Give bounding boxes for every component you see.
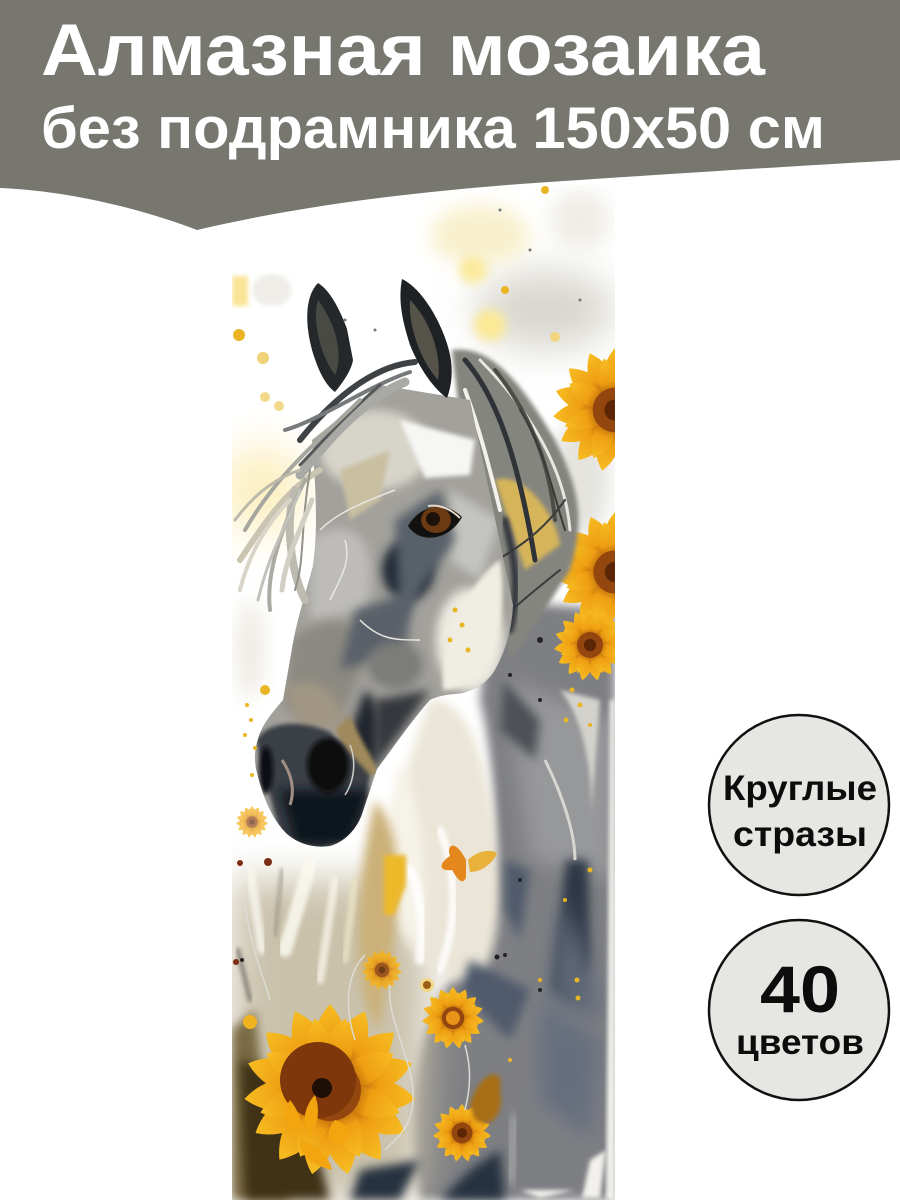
header banner (0, 0, 900, 230)
horse head (255, 385, 513, 850)
small sunflowers (236, 806, 501, 1163)
eye (408, 506, 462, 538)
sunflowers on right (553, 348, 615, 680)
title line 2: без подрамника 150х50 см (41, 96, 825, 161)
painting: horse with sunflowers (232, 186, 615, 1200)
stems (245, 900, 470, 1150)
ears (307, 279, 452, 398)
butterfly (442, 846, 497, 881)
background washes (217, 190, 615, 700)
forelock (235, 362, 415, 610)
badge: round rhinestones: стразы (733, 815, 867, 854)
paint splatters (233, 186, 592, 1062)
neck and lower body wash (232, 600, 615, 1200)
badge: round rhinestones: Круглые (723, 769, 877, 808)
mane right (450, 350, 578, 660)
badge: 40 colours: 40 (760, 952, 840, 1026)
big sunflower (240, 1004, 417, 1200)
badge: 40 colours (709, 920, 889, 1100)
badge: 40 colours: цветов (736, 1023, 864, 1062)
badge: round rhinestones (709, 715, 889, 895)
title line 1: Алмазная мозаика (41, 10, 767, 91)
